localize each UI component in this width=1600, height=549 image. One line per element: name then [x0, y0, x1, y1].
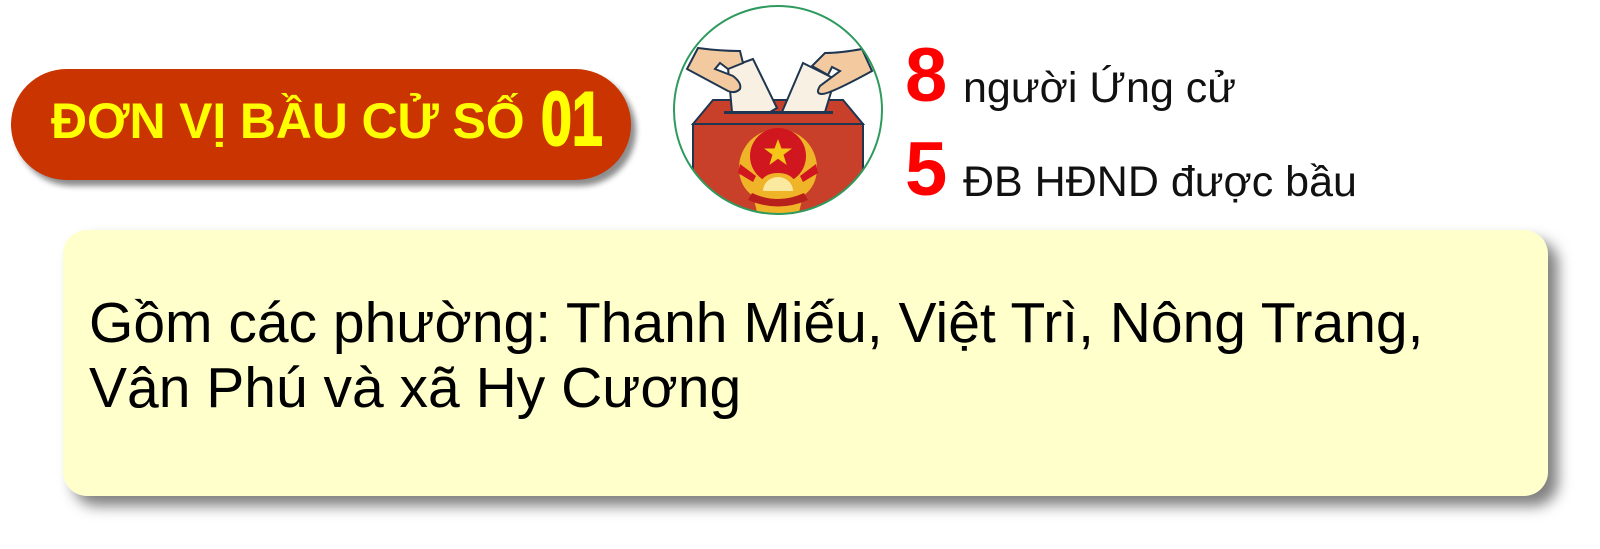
heading text: ĐƠN VỊ BẦU CỬ SỐ — [51, 93, 524, 149]
hand right — [812, 49, 872, 94]
heading pill: electoral unit — [11, 69, 631, 180]
label: ĐB HĐND được bầu — [963, 158, 1357, 206]
circle outline — [674, 6, 882, 214]
box lid — [693, 100, 863, 124]
number 8: 8 — [905, 33, 947, 118]
emblem — [739, 129, 817, 216]
wards text: Gồm các phường: Thanh Miếu, Việt Trì, Nông Trang, — [89, 291, 1423, 355]
stat: elected delegates — [905, 127, 1357, 212]
heading number: 01 — [541, 77, 603, 162]
panel: wards list — [63, 230, 1548, 496]
ballot right — [782, 63, 835, 112]
number 5: 5 — [905, 127, 947, 212]
wards text: Vân Phú và xã Hy Cương — [89, 356, 741, 420]
label: người Ứng cử — [963, 64, 1236, 112]
icon: ballot box with hands in a circle — [673, 5, 883, 215]
ballot left — [728, 59, 777, 112]
hand left — [687, 48, 743, 92]
slot — [724, 111, 833, 114]
stat: candidates — [905, 33, 1236, 118]
wards text — [89, 291, 1423, 420]
box body — [692, 123, 864, 211]
